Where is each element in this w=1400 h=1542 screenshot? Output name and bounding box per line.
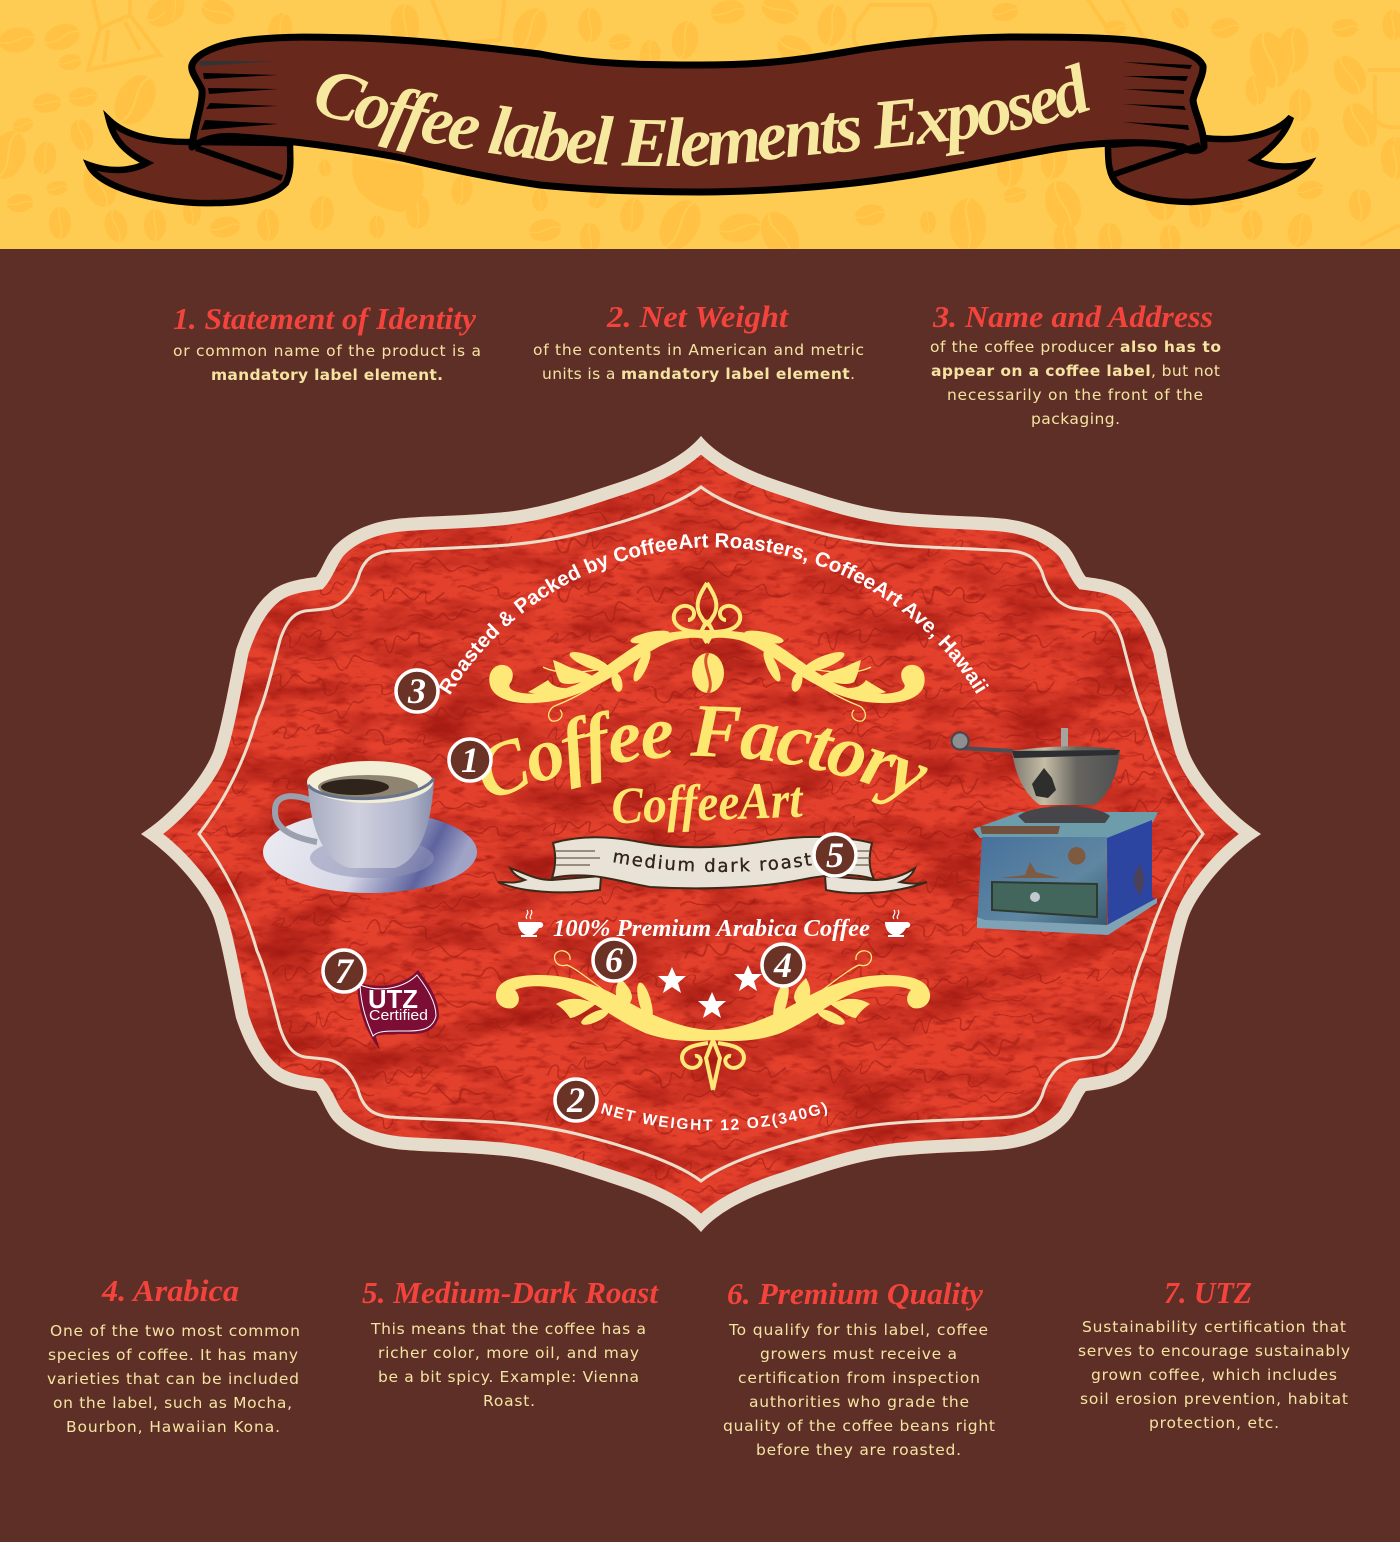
text 7: soil erosion prevention, habitat xyxy=(1080,1390,1348,1408)
panel: net weight xyxy=(533,299,864,383)
text 2 xyxy=(533,341,864,383)
text 7: Sustainability certification that xyxy=(1082,1318,1346,1336)
banner fold shadows xyxy=(196,145,1200,178)
badge numbers: 7 xyxy=(335,951,355,991)
roast ribbon xyxy=(498,836,928,894)
text 5 xyxy=(370,1320,646,1410)
text 4: varieties that can be included xyxy=(47,1370,299,1388)
ribbon text: medium dark roast xyxy=(613,852,812,872)
text 4 xyxy=(47,1322,300,1436)
grinder box front xyxy=(977,837,1107,931)
text 2: units is a mandatory label element. xyxy=(542,365,855,383)
UTZ certified badge: UTZ xyxy=(368,984,418,1014)
text 4: One of the two most common xyxy=(50,1322,300,1340)
header band with coffee pattern xyxy=(0,0,1400,265)
coffee label xyxy=(141,436,1261,1232)
number badges xyxy=(323,670,856,1121)
panel: statement of identity xyxy=(173,301,481,384)
ribbon folds xyxy=(556,851,870,865)
brand name: Coffee Factory xyxy=(482,706,928,804)
heading 3: 3. Name and Address xyxy=(932,299,1213,334)
text 3 xyxy=(930,338,1221,428)
grinder box side xyxy=(1107,820,1157,933)
text 3: packaging. xyxy=(1031,410,1120,428)
badge numbers: 6 xyxy=(605,940,623,980)
text 4: species of coffee. It has many xyxy=(48,1346,298,1364)
text 1: or common name of the product is a xyxy=(173,342,481,360)
text 6: certification from inspection xyxy=(738,1369,980,1387)
icon: coffee cup illustration xyxy=(263,761,477,893)
UTZ certified badge: Certified xyxy=(369,1007,428,1024)
title banner xyxy=(83,34,1316,206)
text 6 xyxy=(723,1321,995,1459)
icon: cup left xyxy=(518,910,543,937)
grinder box top xyxy=(973,812,1158,838)
text 7: serves to encourage sustainably xyxy=(1078,1342,1350,1360)
text 1 xyxy=(173,342,481,384)
label inner line xyxy=(199,487,1203,1181)
text 4: Bourbon, Hawaiian Kona. xyxy=(66,1418,280,1436)
grinder base xyxy=(977,898,1157,935)
text 6: before they are roasted. xyxy=(756,1441,961,1459)
bottom flourish xyxy=(496,951,930,1090)
ribbon tails xyxy=(498,868,601,892)
heading 5: 5. Medium-Dark Roast xyxy=(362,1275,659,1310)
badge numbers: 5 xyxy=(826,835,844,875)
text 3: necessarily on the front of the xyxy=(947,386,1203,404)
text 7: protection, etc. xyxy=(1149,1414,1279,1432)
text 4: on the label, such as Mocha, xyxy=(53,1394,292,1412)
heading 7: 7. UTZ xyxy=(1164,1275,1252,1310)
icon: coffee grinder illustration xyxy=(952,728,1158,935)
sub brand: CoffeeArt xyxy=(610,772,805,835)
producer arc text: Roasted & Packed by CoffeeArt Roasters, CoffeeArt Ave, Hawaii xyxy=(439,533,989,695)
panel: premium quality xyxy=(723,1276,995,1459)
top flourish xyxy=(489,583,925,721)
text 5: This means that the coffee has a xyxy=(370,1320,646,1338)
text 7: grown coffee, which includes xyxy=(1091,1366,1337,1384)
grinder bowl xyxy=(1012,746,1120,805)
title text: Coffee label Elements Exposed xyxy=(316,62,1090,166)
label background xyxy=(130,430,1270,1240)
text 2: of the contents in American and metric xyxy=(533,341,864,359)
badge numbers: 2 xyxy=(566,1080,585,1120)
banner fold lines xyxy=(199,61,1192,130)
stars xyxy=(658,965,762,1018)
grinder bowl flower xyxy=(1032,768,1056,798)
UTZ certified badge xyxy=(357,970,439,1050)
text 3: appear on a coffee label, but not xyxy=(931,362,1220,380)
grinder drawer xyxy=(992,882,1097,917)
text 6: quality of the coffee beans right xyxy=(723,1417,995,1435)
text 6: authorities who grade the xyxy=(749,1393,969,1411)
text 7 xyxy=(1078,1318,1350,1432)
banner left tail xyxy=(89,120,290,203)
premium text: 100% Premium Arabica Coffee xyxy=(553,916,870,942)
icon: cup right xyxy=(885,910,910,937)
ribbon band xyxy=(552,837,874,888)
text 6: growers must receive a xyxy=(760,1345,957,1363)
panel: name and address xyxy=(930,299,1221,428)
banner right tail xyxy=(1108,117,1309,202)
text 5: be a bit spicy. Example: Vienna xyxy=(378,1368,639,1386)
heading 4: 4. Arabica xyxy=(101,1273,239,1308)
heading 2: 2. Net Weight xyxy=(606,299,789,334)
text 5: richer color, more oil, and may xyxy=(378,1344,639,1362)
grinder rust xyxy=(1000,847,1086,878)
faint coffee tool outlines xyxy=(88,0,1400,245)
coffee bean pattern xyxy=(0,0,1400,265)
grinder crank xyxy=(960,748,1013,751)
text 3: of the coffee producer also has to xyxy=(930,338,1221,356)
badge numbers: 1 xyxy=(461,740,479,780)
banner main band xyxy=(192,37,1204,192)
panel: arabica xyxy=(47,1273,300,1436)
bean icon xyxy=(692,653,724,693)
heading 6: 6. Premium Quality xyxy=(727,1276,983,1311)
badge numbers: 3 xyxy=(407,671,426,711)
text 1: mandatory label element. xyxy=(211,366,443,384)
text 5: Roast. xyxy=(483,1392,535,1410)
badge numbers xyxy=(335,671,844,1120)
heading 1: 1. Statement of Identity xyxy=(173,301,476,336)
text 6: To qualify for this label, coffee xyxy=(728,1321,988,1339)
panel: medium-dark roast xyxy=(362,1275,659,1410)
badge numbers: 4 xyxy=(773,945,792,985)
panel: utz xyxy=(1078,1275,1350,1432)
net weight text: NET WEIGHT 12 OZ(340G) xyxy=(601,1102,828,1130)
